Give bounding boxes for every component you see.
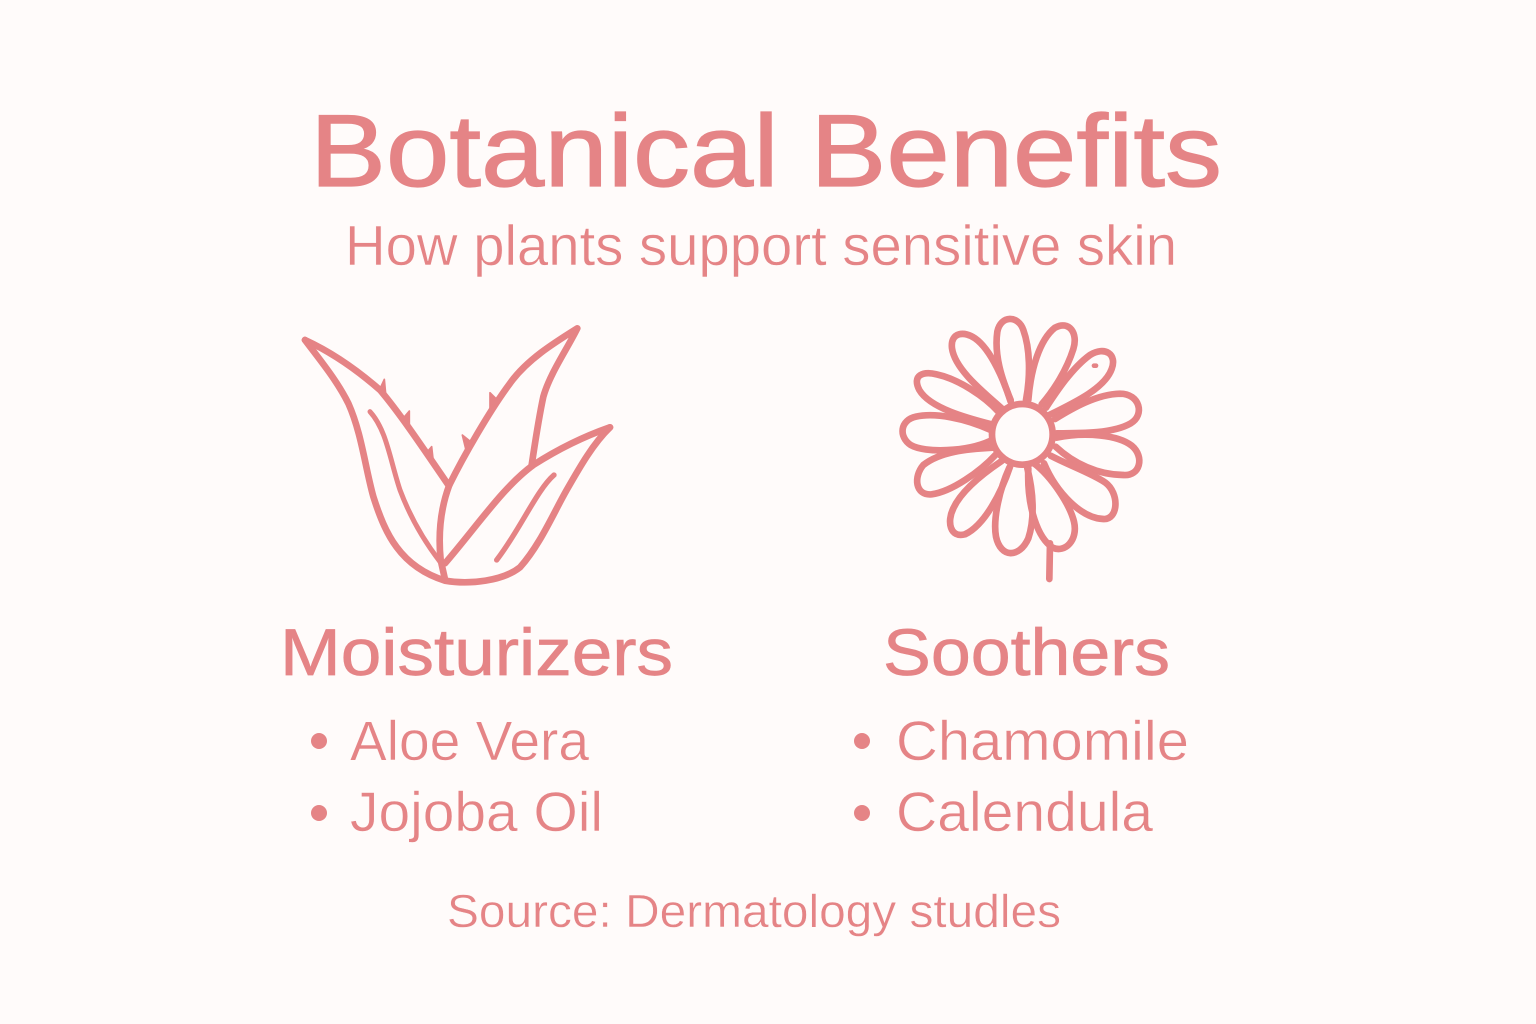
icon: aloe vera [305, 328, 610, 582]
icon: daisy flower [903, 319, 1139, 579]
list: moisturizers: Jojoba Oil [350, 780, 603, 843]
list: soothers: Calendula [896, 780, 1154, 843]
list: moisturizers [311, 709, 603, 843]
list: soothers: Chamomile [896, 709, 1189, 772]
heading: moisturizers: Moisturizers [280, 615, 673, 689]
title: Botanical Benefits [310, 94, 1222, 208]
panel: moisturizers [280, 328, 673, 843]
list: moisturizers: Aloe Vera [350, 709, 590, 772]
list: soothers [854, 709, 1189, 843]
panel: soothers [854, 319, 1189, 843]
source note: Source: Dermatology studles [447, 885, 1061, 937]
heading: soothers: Soothers [883, 615, 1170, 689]
subtitle: How plants support sensitive skin [345, 214, 1177, 278]
